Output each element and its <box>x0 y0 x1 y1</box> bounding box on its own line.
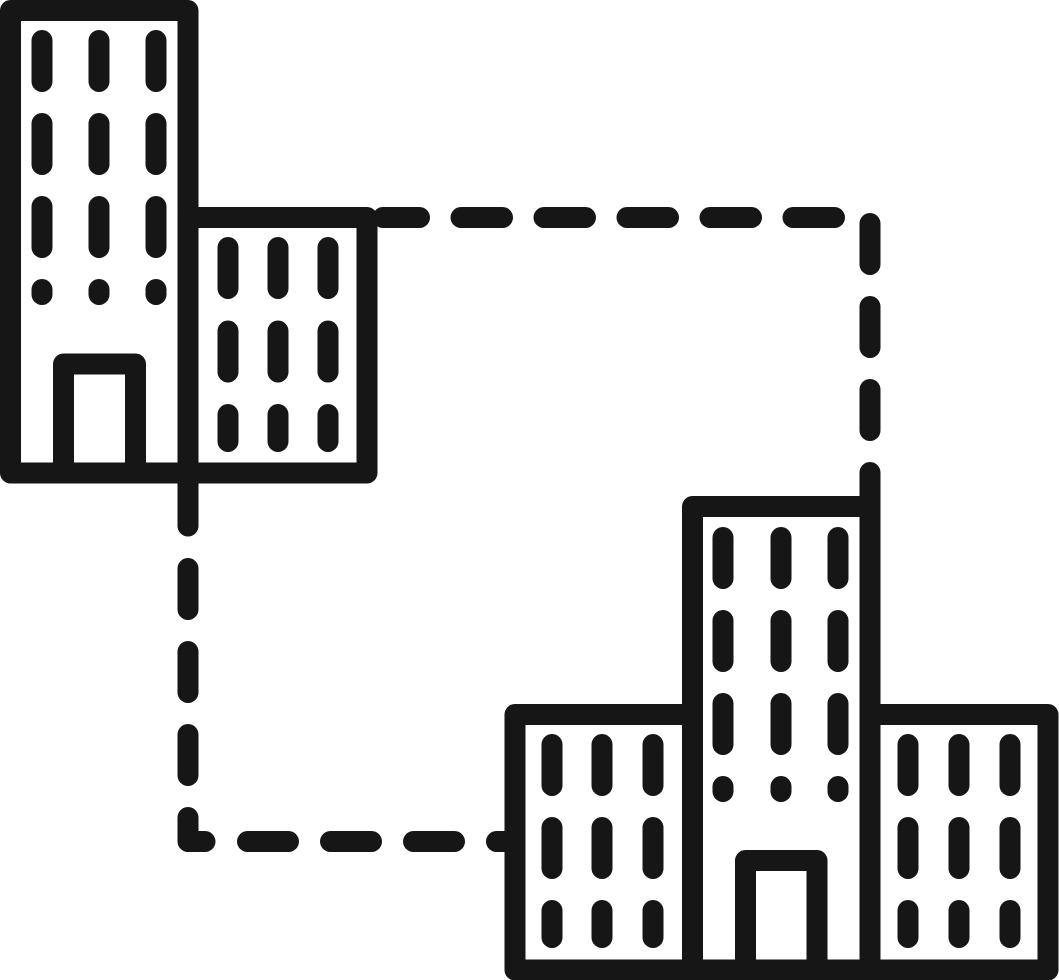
left wing windows <box>552 744 653 938</box>
tower windows <box>723 538 838 792</box>
wing windows <box>228 248 328 442</box>
tower windows <box>42 40 156 294</box>
tall tower outline <box>10 10 188 473</box>
arrow: bottom dashed connector <box>188 483 510 842</box>
left wing and base outline <box>515 714 1048 970</box>
central tower outline <box>692 506 870 970</box>
arrow: top dashed connector <box>383 218 870 510</box>
icon: bottom-right building <box>515 506 1048 970</box>
side wing outline <box>188 218 367 473</box>
door <box>746 860 817 970</box>
right wing windows <box>908 744 1010 938</box>
icon: top-left building <box>10 10 367 473</box>
door <box>64 364 136 473</box>
